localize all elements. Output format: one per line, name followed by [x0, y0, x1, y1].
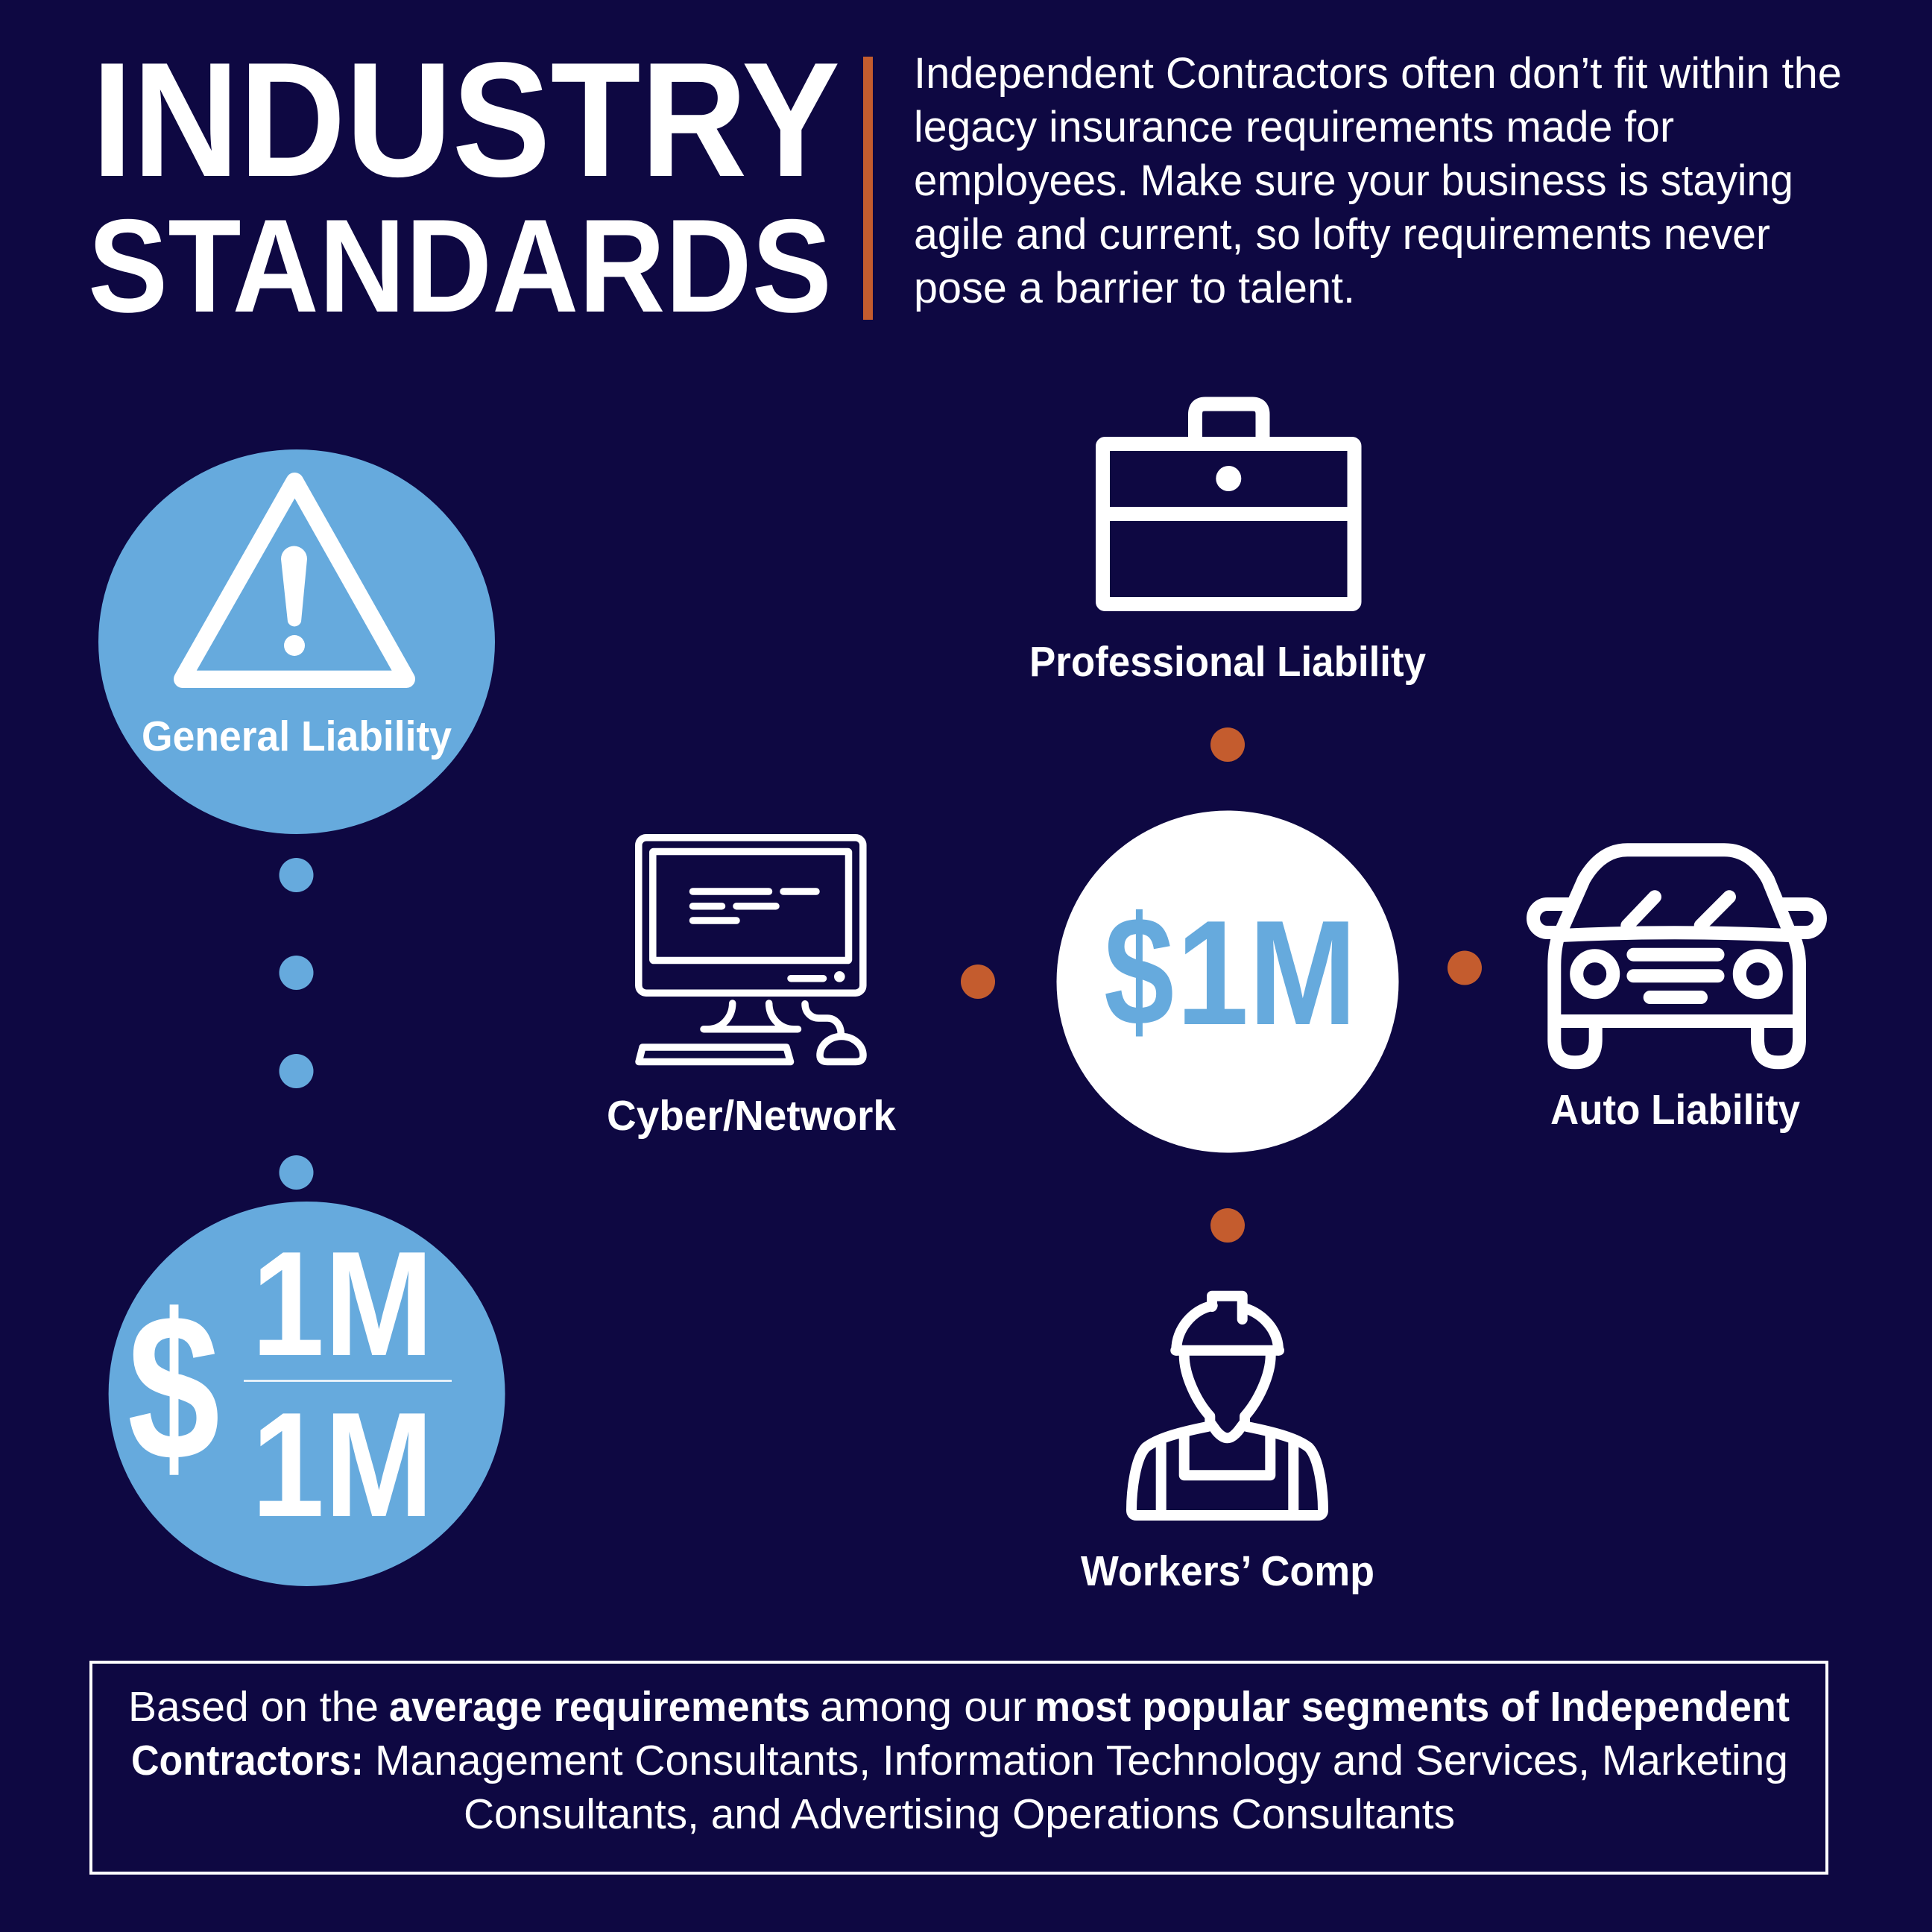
limit fraction: 1M [252, 1382, 434, 1548]
intro text: Independent Contractors often don’t fit within the [914, 49, 1842, 98]
footnote text [128, 1683, 1790, 1838]
icon: warning triangle [183, 482, 406, 679]
limit dollar sign: $ [127, 1272, 220, 1504]
title: INDUSTRY [92, 29, 840, 211]
limit fraction: 1M [252, 1221, 434, 1387]
intro text: employees. Make sure your business is staying [914, 157, 1793, 205]
intro text [914, 49, 1842, 312]
label: auto liability: Auto Liability [1550, 1086, 1800, 1134]
footnote text: average requirements [389, 1683, 810, 1731]
center circle: $1M: $ [1104, 885, 1174, 1058]
label: professional liability: Professional Liability [1029, 638, 1426, 686]
footnote text: Based on the [128, 1683, 379, 1731]
orange dot top [1210, 727, 1245, 762]
icon: briefcase [1103, 404, 1354, 604]
label: general liability: General Liability [142, 713, 452, 760]
intro text: agile and current, so lofty requirements never [914, 210, 1770, 259]
footnote text: most popular segments of Independent [1035, 1683, 1790, 1731]
icon: car [1533, 850, 1820, 1062]
orange dot left [961, 965, 995, 999]
footnote text: Consultants, and Advertising Operations Consultants [464, 1790, 1455, 1838]
title: STANDARDS [88, 192, 832, 340]
orange dot right [1448, 951, 1482, 985]
limit fraction [244, 1221, 452, 1548]
title divider bar [863, 57, 873, 320]
panel: general liability circle [98, 449, 495, 834]
intro text: legacy insurance requirements made for [914, 103, 1674, 151]
panel: limits circle [109, 1202, 505, 1586]
icon: computer [639, 838, 863, 1061]
center circle: $1M: 1M [1176, 890, 1357, 1056]
orange dot bottom [1210, 1208, 1245, 1243]
label: workers' comp: Workers’ Comp [1081, 1547, 1374, 1595]
blue connector dots [279, 858, 313, 1190]
footnote text: among our [820, 1683, 1026, 1731]
footnote box [91, 1662, 1827, 1873]
footnote text: Management Consultants, Information Technology and Services, Marketing [375, 1737, 1788, 1784]
center circle: $1M [1057, 811, 1398, 1152]
intro text: pose a barrier to talent. [914, 264, 1355, 312]
icon: construction worker [1131, 1296, 1323, 1515]
title [88, 29, 840, 340]
footnote text: Contractors: [131, 1737, 364, 1784]
label: cyber/network: Cyber/Network [607, 1092, 896, 1140]
